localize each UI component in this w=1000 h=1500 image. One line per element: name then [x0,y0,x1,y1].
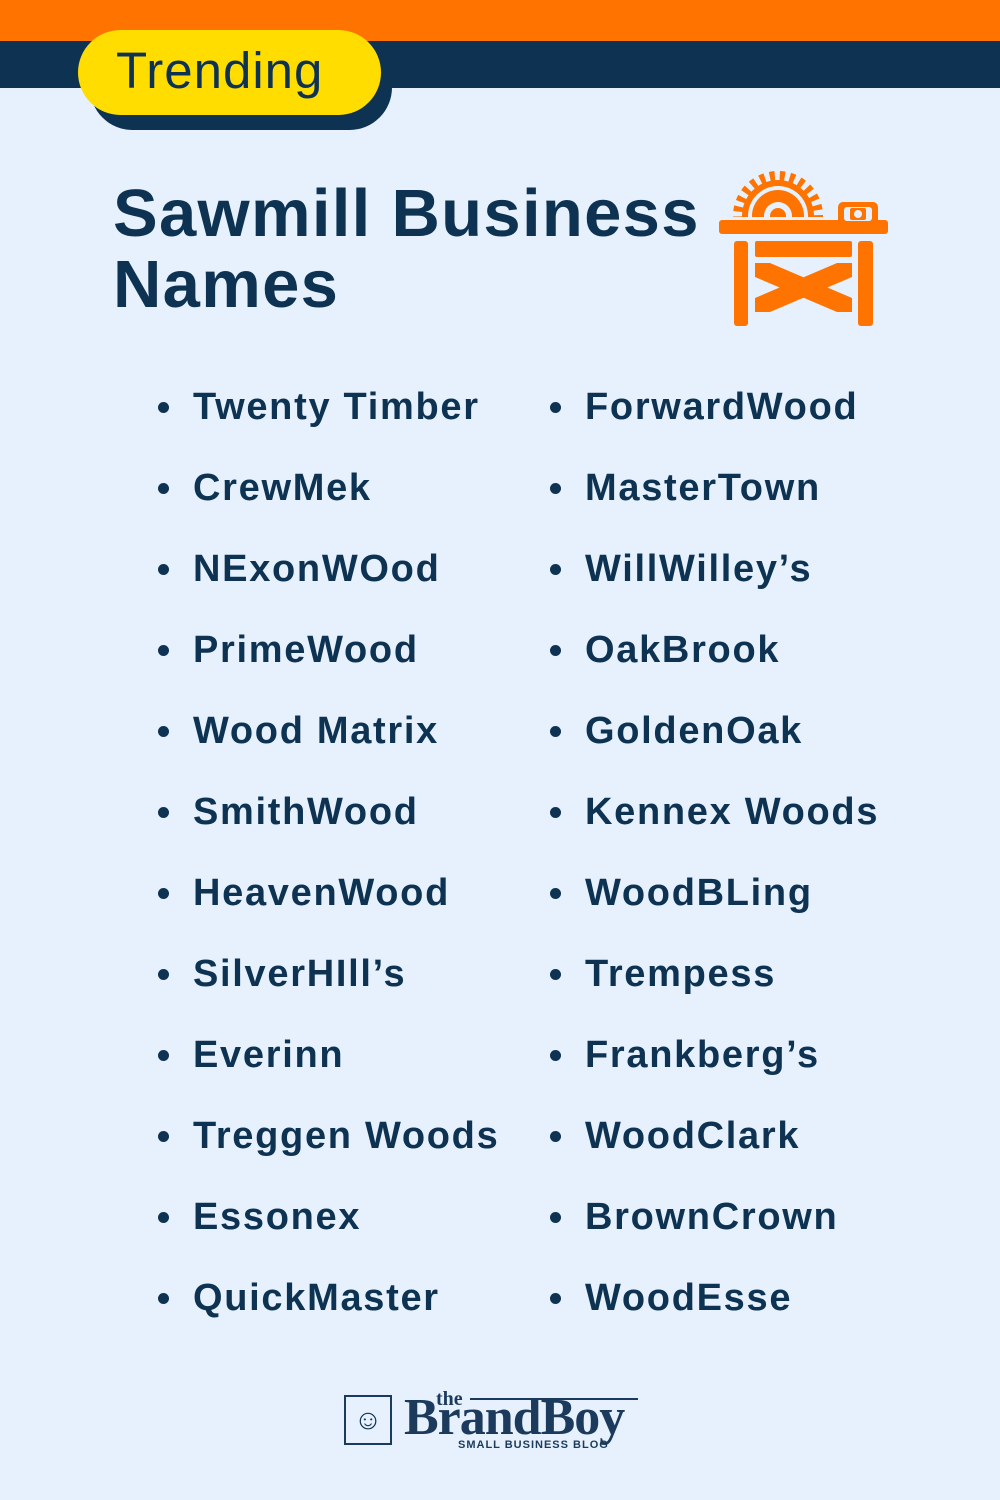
list column 1: CrewMek [193,467,372,509]
list column 1: Wood Matrix [193,710,439,752]
list column 1: SilverHIll’s [193,953,406,995]
title: Names [113,247,339,322]
list column 1: QuickMaster [193,1277,440,1319]
list column 1 [158,386,499,1319]
navy band [0,41,1000,88]
list column 1: HeavenWood [193,872,450,914]
list column 2: BrownCrown [585,1196,838,1238]
list column 2: WoodEsse [585,1277,792,1319]
list column 2: Kennex Woods [585,791,879,833]
list column 2: OakBrook [585,629,780,671]
badge: Trending: Trending [116,42,323,99]
badge: Trending [78,30,392,130]
list column 1: Essonex [193,1196,361,1238]
list column 1: Everinn [193,1034,344,1076]
title [113,176,700,322]
logo: theBrandBoy: ☺ [354,1404,382,1435]
list column 2: ForwardWood [585,386,858,428]
logo: theBrandBoy: the [436,1388,463,1410]
list column 1: Twenty Timber [193,386,480,428]
list column 1: PrimeWood [193,629,419,671]
list column 2 [550,386,879,1319]
logo: theBrandBoy [344,1388,638,1451]
list column 2: Frankberg’s [585,1034,820,1076]
list column 1: Treggen Woods [193,1115,499,1157]
list column 2: WoodBLing [585,872,813,914]
title: Sawmill Business [113,176,700,251]
top orange bar [0,0,1000,41]
icon: sawmill table saw [719,171,888,326]
list column 2: Trempess [585,953,776,995]
list column 1: NExonWOod [193,548,440,590]
list column 2: WillWilley’s [585,548,812,590]
list column 1: SmithWood [193,791,419,833]
list column 2: WoodClark [585,1115,800,1157]
logo: theBrandBoy: SMALL BUSINESS BLOG [458,1439,609,1451]
list column 2: GoldenOak [585,710,803,752]
list column 2: MasterTown [585,467,821,509]
logo: theBrandBoy: BrandBoy [404,1389,624,1446]
